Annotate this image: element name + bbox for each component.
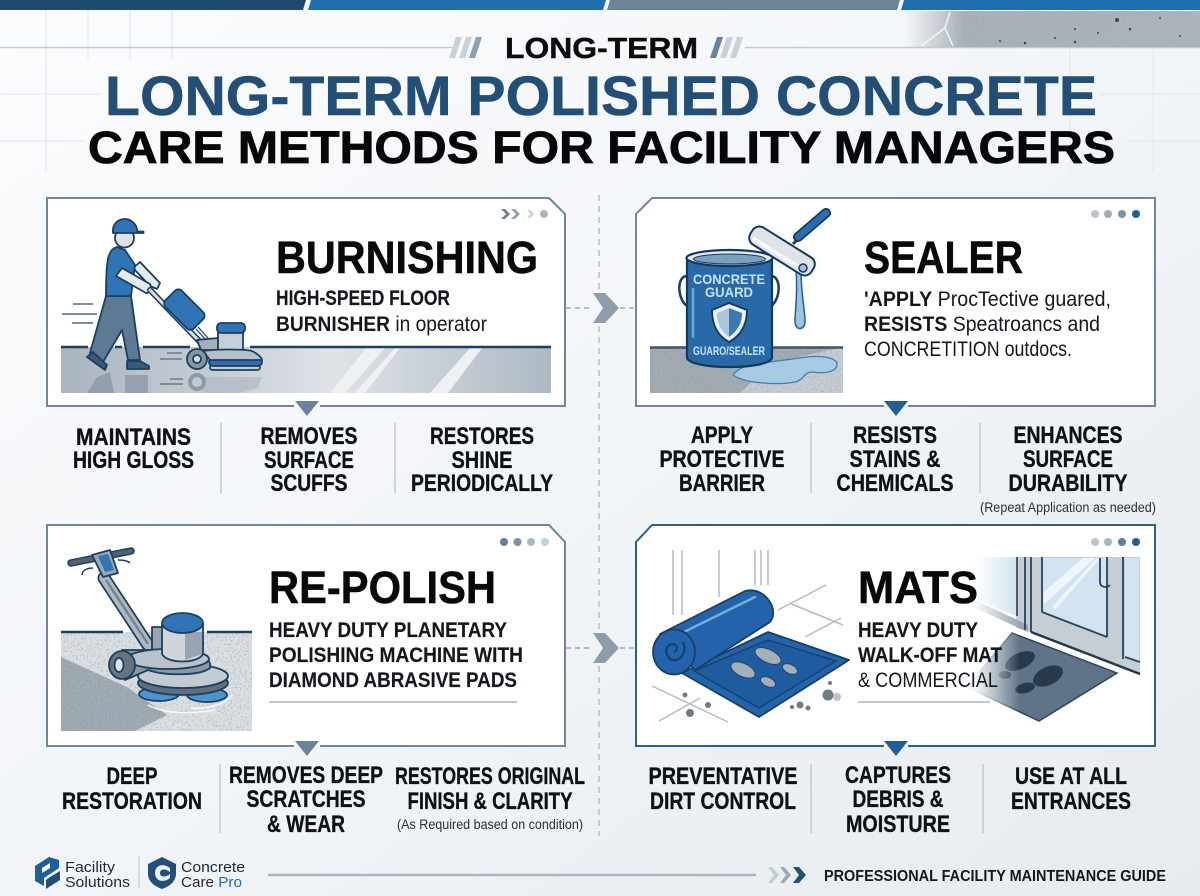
panel: sealer (636, 198, 1155, 416)
illustration: sealer can and roller: GUARD (705, 284, 753, 300)
bullet: restores original finish and clarity: RESTORES ORIGINAL (395, 763, 585, 790)
bullet: apply protective barrier: BARRIER (679, 470, 765, 497)
concrete texture corner (905, 11, 1200, 47)
bullet: preventative dirt control: PREVENTATIVE (648, 763, 798, 790)
illustration: entrance door and dark mat (960, 550, 1140, 725)
description (858, 619, 1002, 702)
top colour bar (0, 0, 1200, 10)
bullet: maintains high gloss (73, 424, 194, 474)
logo: facility solutions: Facility (65, 859, 116, 876)
illustration: sealer can and roller: CONCRETE (693, 271, 765, 287)
main title line: LONG-TERM POLISHED CONCRETE (105, 64, 1097, 127)
bullet: preventative dirt control (648, 763, 798, 815)
heading: RE-POLISH (269, 562, 496, 613)
bullet: enhances surface durability (980, 422, 1156, 515)
description: 'APPLY ProcTective guared, (864, 288, 1111, 311)
title block (88, 33, 1115, 173)
panel: re-polish (47, 525, 565, 756)
centre dashed divider (598, 195, 600, 836)
bullet: restores shine periodically: RESTORES (430, 423, 534, 450)
bullet: resists stains and chemicals: RESISTS (853, 422, 937, 449)
logo: concrete care pro: Concrete (181, 859, 245, 876)
card frame (636, 198, 1155, 406)
description: HEAVY DUTY PLANETARY (269, 619, 507, 642)
illustration: planetary polishing machine (61, 550, 252, 731)
down triangle (295, 401, 319, 416)
illustration: operator with burnisher (61, 219, 551, 393)
bullet: maintains high gloss: HIGH GLOSS (73, 447, 194, 474)
description: WALK-OFF MAT (858, 644, 1002, 667)
description (864, 288, 1111, 361)
description: POLISHING MACHINE WITH (269, 644, 523, 667)
bullet: enhances surface durability: DURABILITY (1008, 470, 1128, 497)
bullet: removes deep scratches and wear: REMOVES DEEP (229, 762, 383, 789)
card frame (47, 198, 565, 406)
down triangle (295, 741, 319, 756)
bullet: deep restoration (62, 763, 202, 815)
bullet: resists stains and chemicals (836, 422, 954, 497)
bullets: sealer (660, 422, 1156, 515)
bullet: preventative dirt control: DIRT CONTROL (650, 788, 796, 815)
bullet: resists stains and chemicals: STAINS & (850, 446, 940, 473)
progress dots (500, 538, 549, 546)
logo: facility solutions: Solutions (65, 874, 130, 891)
bullet: enhances surface durability: SURFACE (1023, 446, 1113, 473)
footer tagline: PROFESSIONAL FACILITY MAINTENANCE GUIDE (824, 868, 1166, 885)
bullet: captures debris and moisture: DEBRIS & (852, 786, 944, 813)
bullet: removes deep scratches and wear: SCRATCHES (246, 786, 366, 813)
bullet: use at all entrances (1011, 763, 1131, 815)
bullet: restores shine periodically (411, 423, 553, 497)
panel: burnishing (47, 198, 565, 416)
heading: SEALER (864, 232, 1023, 283)
heading: BURNISHING (276, 232, 538, 283)
bullet: deep restoration: DEEP (106, 763, 158, 790)
down triangle (884, 741, 908, 756)
bullet: restores original finish and clarity: FINISH & CLARITY (408, 788, 572, 815)
bullets: re-polish (62, 762, 585, 838)
bullet: captures debris and moisture (845, 762, 951, 838)
bullet: deep restoration: RESTORATION (62, 788, 202, 815)
description (269, 619, 523, 702)
description: DIAMOND ABRASIVE PADS (269, 669, 517, 692)
bullet: removes surface scuffs: SURFACE (264, 447, 354, 474)
description (276, 287, 487, 336)
down triangle (884, 401, 908, 416)
bullet: removes deep scratches and wear: & WEAR (267, 811, 345, 838)
card frame (47, 525, 565, 746)
bullet: apply protective barrier: PROTECTIVE (660, 446, 784, 473)
description: BURNISHER in operator (276, 313, 487, 336)
progress dots (1091, 210, 1140, 218)
subtitle line: CARE METHODS FOR FACILITY MANAGERS (88, 122, 1115, 173)
panel: mats (636, 525, 1155, 756)
bullet: use at all entrances: ENTRANCES (1011, 788, 1131, 815)
card frame (636, 525, 1155, 746)
eyebrow: long-term (449, 33, 743, 65)
illustration: rolled walk-off mat (652, 550, 849, 722)
bullet: enhances surface durability: (Repeat Application as needed) (980, 500, 1156, 515)
arrow: burnishing to sealer (566, 293, 635, 323)
bullet: maintains high gloss: MAINTAINS (76, 424, 191, 451)
bullets: mats (648, 762, 1131, 838)
bullet: removes surface scuffs: REMOVES (260, 423, 358, 450)
bullet: removes surface scuffs: SCUFFS (270, 470, 348, 497)
bullet: restores original finish and clarity: (As Required based on condition) (397, 817, 583, 832)
bullet: enhances surface durability: ENHANCES (1014, 422, 1122, 449)
eyebrow: long-term: LONG-TERM (505, 33, 698, 65)
bullet: resists stains and chemicals: CHEMICALS (836, 470, 954, 497)
footer (35, 856, 1166, 891)
logo: concrete care pro: Care Pro (181, 874, 242, 891)
description: HEAVY DUTY (858, 619, 978, 642)
bullet: restores shine periodically: PERIODICALLY (411, 470, 553, 497)
heading: MATS (858, 562, 978, 613)
arrow: re-polish to mats (566, 633, 635, 663)
bullet: restores original finish and clarity (395, 763, 585, 832)
bullet: captures debris and moisture: CAPTURES (845, 762, 951, 789)
bullet: apply protective barrier: APPLY (691, 422, 753, 449)
description: RESISTS Speatroancs and (864, 313, 1100, 336)
illustration: sealer can and roller (650, 213, 843, 393)
progress chevrons (501, 209, 548, 219)
bullet: apply protective barrier (660, 422, 784, 497)
bullet: restores shine periodically: SHINE (452, 447, 512, 474)
logo: facility solutions (35, 857, 130, 891)
description: & COMMERCIAL (858, 669, 998, 692)
bullet: captures debris and moisture: MOISTURE (846, 811, 950, 838)
illustration: sealer can and roller: GUARO/SEALER (693, 346, 766, 358)
logo: concrete care pro (148, 857, 245, 891)
description: CONCRETITION outdocs. (864, 338, 1072, 361)
bullet: use at all entrances: USE AT ALL (1015, 763, 1127, 790)
bullets: burnishing (73, 423, 553, 497)
description: HIGH-SPEED FLOOR (276, 287, 450, 310)
bullet: removes surface scuffs (260, 423, 358, 497)
progress dots (1091, 538, 1140, 546)
footer chevrons (768, 867, 806, 883)
bullet: removes deep scratches and wear (229, 762, 383, 838)
